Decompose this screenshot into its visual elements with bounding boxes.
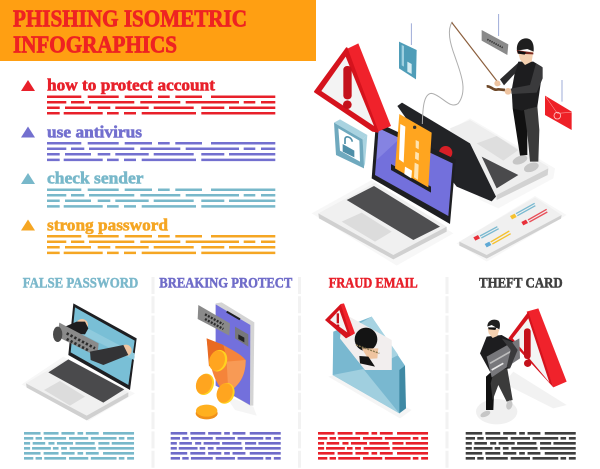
- title banner: PHISHING ISOMETRIC: [13, 7, 247, 33]
- title banner: [0, 0, 316, 61]
- front laptop: [312, 122, 456, 266]
- heading: THEFT CARD: [479, 275, 563, 291]
- text lines: [171, 433, 281, 458]
- hero thief with fishing rod: [452, 22, 543, 174]
- lock tile: [334, 119, 367, 168]
- warning triangle: [315, 43, 391, 168]
- head: [518, 52, 533, 65]
- paper cards panel: [457, 196, 567, 262]
- phone with shield and coins: [193, 302, 257, 419]
- list item: strong password: [21, 215, 275, 253]
- hands: [494, 80, 500, 86]
- laptop with hands: [22, 303, 137, 421]
- list item: use antivirus: use antivirus: [47, 122, 142, 141]
- theft card section: [466, 275, 576, 458]
- envelope with mask letter: [325, 303, 412, 418]
- hanging teal card: [399, 23, 417, 79]
- thief with card and warning: [476, 308, 567, 424]
- legs: [513, 108, 527, 156]
- list item: strong password: strong password: [47, 215, 169, 234]
- text lines: [466, 433, 576, 458]
- breaking protect section: [159, 275, 292, 458]
- fraud email section: [318, 275, 428, 458]
- text lines: [318, 433, 428, 458]
- heading: FALSE PASSWORD: [23, 275, 138, 291]
- fishing rod: [452, 22, 500, 85]
- title banner: INFOGRAPHICS: [13, 33, 177, 59]
- heading: BREAKING PROTECT: [159, 275, 292, 291]
- hanging red envelope: [545, 80, 572, 130]
- coins: [193, 348, 238, 419]
- hero illustration: phishing laptops: [312, 14, 572, 266]
- torso and arms: [512, 62, 542, 111]
- list item: use antivirus: [21, 122, 275, 160]
- fishing line: [422, 22, 463, 124]
- list item: check sender: check sender: [47, 169, 144, 188]
- heading: FRAUD EMAIL: [329, 275, 418, 291]
- text lines: [24, 433, 134, 458]
- list item: how to protect account: how to protect account: [47, 76, 215, 95]
- false password section: [22, 275, 138, 458]
- list item: check sender: [21, 169, 275, 206]
- list item: how to protect account: [21, 76, 275, 113]
- hooked card: [391, 114, 432, 193]
- hanging password plate: [482, 14, 508, 55]
- shoes: [511, 154, 529, 166]
- back laptop: [397, 103, 555, 208]
